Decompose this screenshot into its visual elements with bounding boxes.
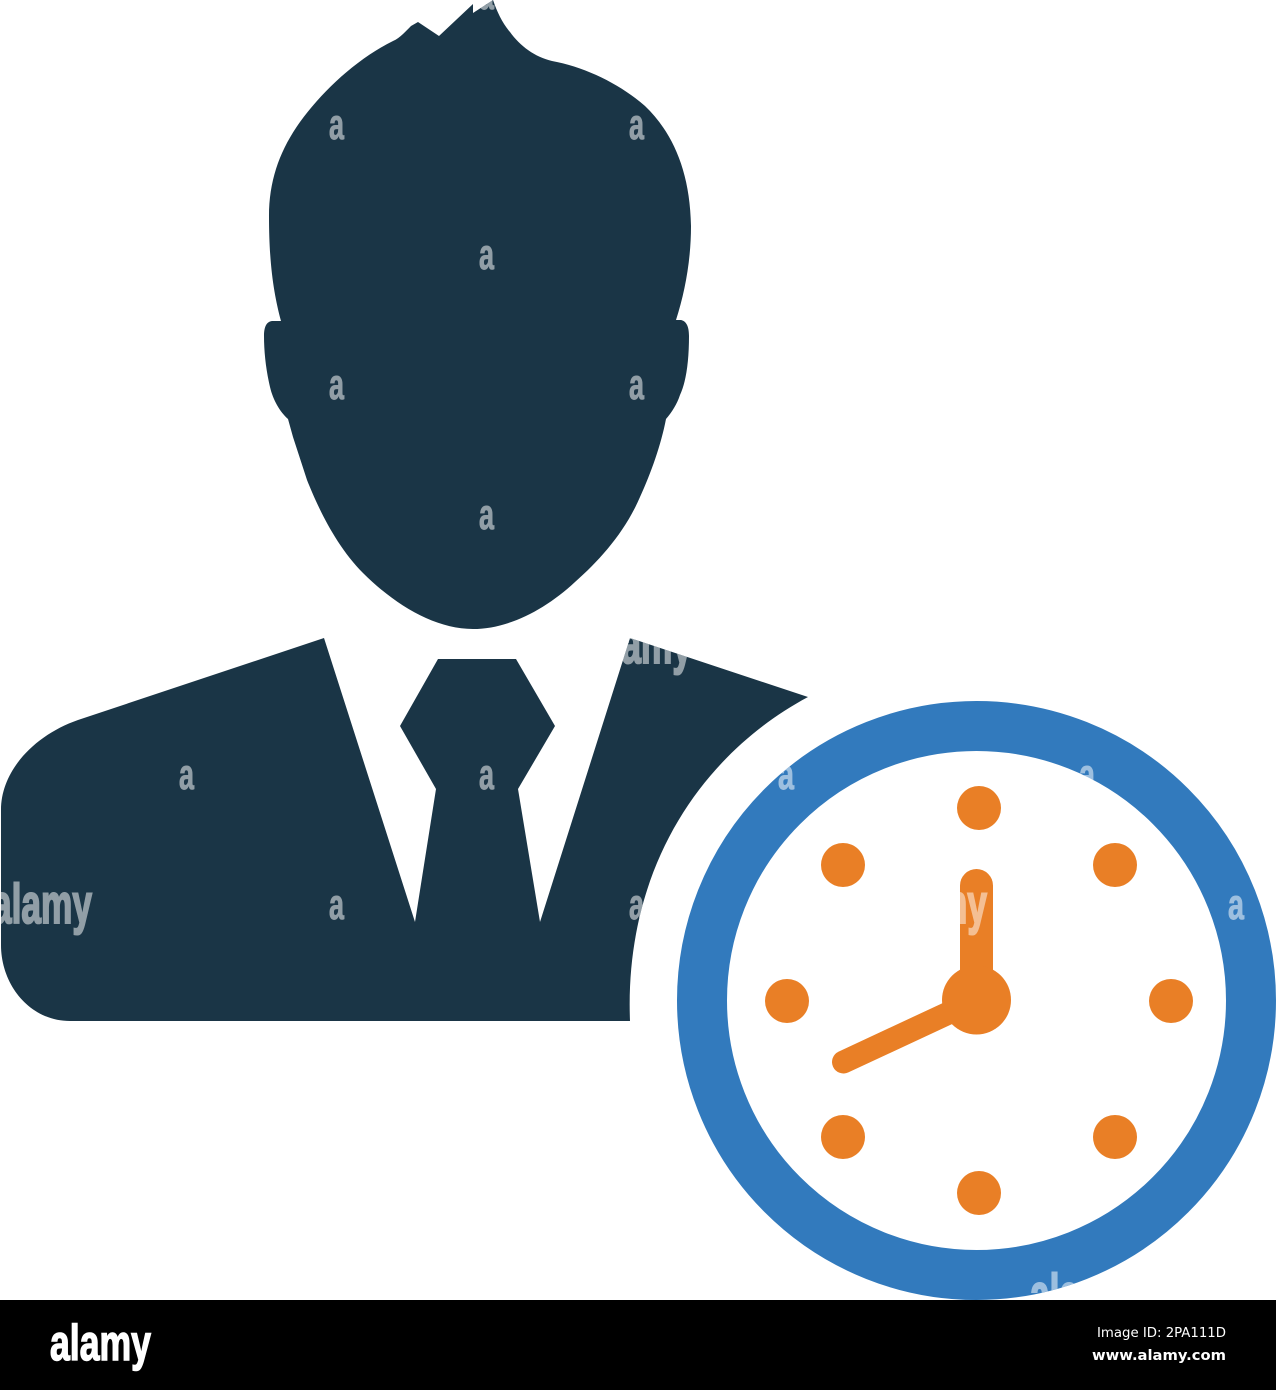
watermark on head — [329, 0, 645, 539]
watermark on suit: a — [179, 751, 195, 799]
watermark on clock hand: alamy — [887, 872, 987, 935]
watermark on head: a — [479, 491, 495, 539]
watermark on head: a — [629, 361, 645, 409]
clock ring — [702, 726, 1251, 1275]
footer image id: Image ID: 2PA111D — [1097, 1326, 1226, 1341]
icon: businessman suit — [1, 638, 808, 1021]
clock centre — [942, 966, 1011, 1034]
watermark on clock ring: a — [1079, 751, 1096, 799]
footer logo: alamy — [50, 1315, 151, 1371]
watermark on clock ring: a — [778, 751, 795, 799]
watermark on suit — [0, 612, 692, 935]
footer url: www.alamy.com — [1092, 1348, 1226, 1364]
watermark on head: a — [629, 101, 645, 149]
clock hands — [844, 886, 976, 1062]
footer background — [0, 1300, 1276, 1390]
clock hour dots — [765, 786, 1193, 1215]
watermark on suit: a — [329, 881, 345, 929]
watermark on head: a — [329, 101, 345, 149]
watermark on clock ring: a — [1228, 881, 1245, 929]
icon: clock — [702, 726, 1251, 1275]
watermark on head: a — [479, 231, 495, 279]
watermark on head: a — [329, 361, 345, 409]
icon: businessman head — [264, 0, 691, 629]
footer bar — [0, 1300, 1276, 1390]
watermark on suit: a — [629, 881, 645, 929]
watermark on clock ring — [778, 751, 1245, 1325]
watermark on suit: a — [479, 751, 495, 799]
watermark on suit: alamy — [592, 612, 692, 675]
watermark on clock ring: alamy — [1030, 1262, 1130, 1325]
